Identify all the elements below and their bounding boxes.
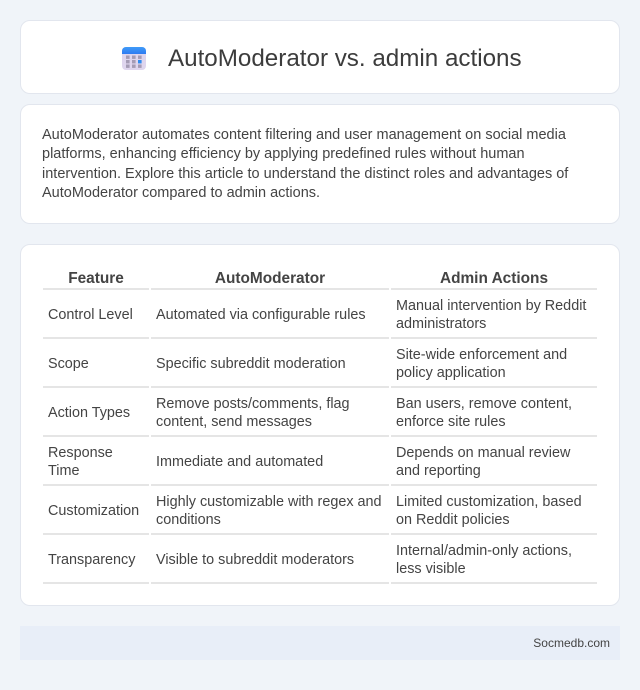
intro paragraph: platforms, enhancing efficiency by applying predefined rules without human — [42, 146, 525, 162]
row: Action Types: Remove posts/comments, flag — [156, 396, 350, 412]
intro paragraph: AutoModerator compared to admin actions. — [42, 185, 320, 201]
row: Customization: on Reddit policies — [396, 512, 510, 528]
row: Action Types: Ban users, remove content, — [396, 396, 572, 412]
footer bar — [20, 626, 620, 660]
row: Transparency — [48, 543, 572, 577]
row: Scope: Specific subreddit moderation — [156, 356, 346, 372]
row: Action Types: content, send messages — [156, 414, 312, 430]
panel: intro text — [20, 104, 620, 224]
row: Response Time: Immediate and automated — [156, 454, 323, 470]
intro paragraph: intervention. Explore this article to understand the distinct roles and advantages of — [42, 166, 568, 182]
row: Transparency: Internal/admin-only actions, — [396, 543, 572, 559]
row: Scope: Scope — [48, 356, 89, 372]
row: Transparency: Transparency — [48, 552, 135, 568]
row: Action Types — [48, 396, 572, 430]
row: Control Level: Control Level — [48, 307, 133, 323]
row: Control Level: Manual intervention by Reddit — [396, 298, 586, 314]
row: Scope: policy application — [396, 365, 506, 381]
table header — [68, 270, 548, 287]
row: Customization: conditions — [156, 512, 221, 528]
row: Customization — [48, 494, 582, 528]
row: Control Level — [48, 298, 586, 332]
row: Action Types: Action Types — [48, 405, 130, 421]
panel: title card — [20, 20, 620, 94]
row: Response Time: Depends on manual review — [396, 445, 570, 461]
row: Response Time: Response — [48, 445, 113, 461]
title: AutoModerator vs. admin actions — [168, 45, 522, 72]
panel: comparison table — [20, 244, 620, 606]
icon: calendar — [122, 47, 146, 70]
row: Control Level: Automated via configurable rules — [156, 307, 366, 323]
table header: Feature — [68, 270, 124, 287]
row: Scope — [48, 347, 567, 381]
row: Control Level: administrators — [396, 316, 486, 332]
row: Customization: Customization — [48, 503, 139, 519]
row: Customization: Limited customization, based — [396, 494, 582, 510]
intro paragraph: AutoModerator automates content filtering and user management on social media — [42, 127, 566, 143]
row: Response Time: Time — [48, 463, 79, 479]
row: Response Time: and reporting — [396, 463, 481, 479]
row: Scope: Site-wide enforcement and — [396, 347, 567, 363]
row: Response Time — [48, 445, 570, 479]
row: Action Types: enforce site rules — [396, 414, 506, 430]
intro paragraph — [42, 127, 568, 201]
row: Transparency: less visible — [396, 561, 466, 577]
footer credit: Socmedb.com — [533, 636, 610, 650]
row: Customization: Highly customizable with regex and — [156, 494, 382, 510]
table header: Admin Actions — [440, 270, 548, 287]
table header: AutoModerator — [215, 270, 325, 287]
row: Transparency: Visible to subreddit moderators — [156, 552, 354, 568]
